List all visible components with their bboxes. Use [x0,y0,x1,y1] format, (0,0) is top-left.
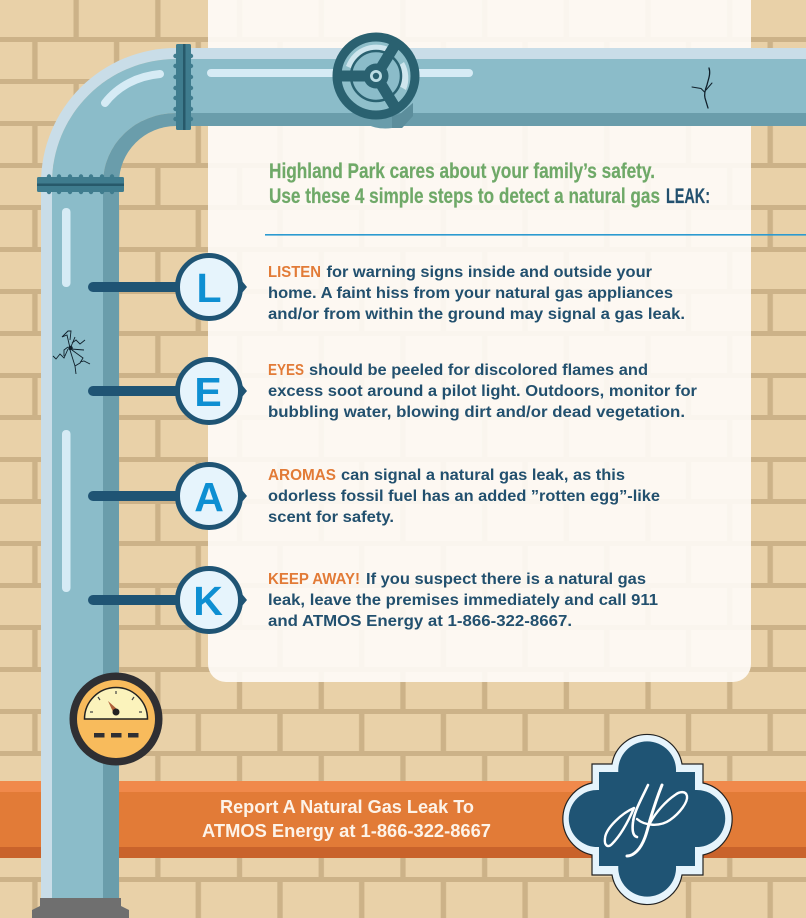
text block: listen: and/or from within the ground may signal a gas leak. [268,306,685,323]
text block: eyes: EYES [268,362,304,379]
marker: A: A [194,474,224,520]
logo monogram [605,785,687,856]
text block: aromas: scent for safety. [268,509,394,526]
panel: translucent content card [208,0,751,682]
marker: K: K [193,578,223,624]
banner text: ATMOS Energy at 1-866-322-8667 [202,820,491,841]
text block: listen: LISTEN [268,264,321,281]
marker: E: E [194,369,222,415]
text block: listen: home. A faint hiss from your natural gas appliances [268,285,673,302]
text block: keep away: KEEP AWAY! [268,571,360,588]
marker: L [88,256,247,318]
banner text [202,796,491,841]
text block: eyes [268,362,697,421]
text block: keep away [268,571,658,630]
text block: keep away: leak, leave the premises immediately and call 911 [268,592,658,609]
text block: aromas: can signal a natural gas leak, as this [341,467,625,484]
banner: orange report pipe [0,781,806,858]
icon: crack on horizontal pipe [692,68,712,108]
text block: eyes: should be peeled for discolored flames and [309,362,648,379]
heading: safety intro: Highland Park cares about your family’s safety. [269,160,655,183]
marker: K [88,568,247,632]
banner text: Report A Natural Gas Leak To [220,796,474,817]
text block: listen [268,264,685,323]
text block: eyes: excess soot around a pilot light. Outdoors, monitor for [268,383,697,400]
text block: eyes: bubbling water, blowing dirt and/or dead vegetation. [268,404,685,421]
text block: aromas: odorless fossil fuel has an added ”rotten egg”-like [268,488,660,505]
text block: aromas [268,467,660,526]
pipe: horizontal run [176,48,806,126]
marker: L: L [196,265,222,311]
icon: valve wheel [336,37,415,128]
icon: shattered crack on vertical pipe [53,331,90,374]
pipe highlights [62,69,473,592]
logo: HP quatrefoil [563,734,732,905]
flange: elbow bottom [37,174,124,194]
marker: E [88,360,247,422]
pipe base [32,898,129,918]
heading: safety intro: LEAK: [666,185,710,208]
text block: keep away: If you suspect there is a natural gas [366,571,646,588]
heading: safety intro [269,160,710,208]
text block: keep away: and ATMOS Energy at 1-866-322-8667. [268,613,572,630]
pipe: elbow and vertical run [41,48,176,903]
icon: pressure gauge [70,672,162,766]
text block: listen: for warning signs inside and outside your [326,264,652,281]
divider rule [265,234,806,236]
marker: A [88,464,247,528]
flange: top [173,44,193,130]
text block: aromas: AROMAS [268,467,336,484]
heading: safety intro: Use these 4 simple steps to detect a natural gas [269,185,660,208]
